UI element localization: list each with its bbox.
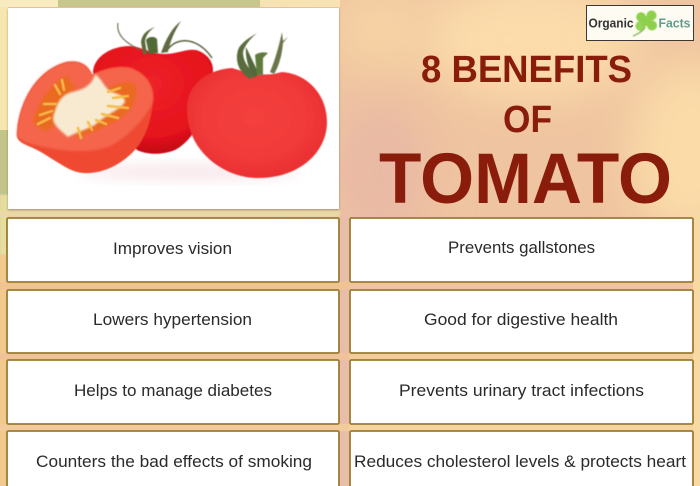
benefit: lowers hypertension bbox=[7, 290, 339, 353]
back tomato bbox=[93, 21, 213, 154]
benefit: cholesterol and heart: Reduces cholesterol levels & protects heart bbox=[354, 452, 686, 471]
benefit: urinary tract infections bbox=[350, 360, 693, 424]
cut face bbox=[17, 62, 153, 151]
benefit: prevents gallstones: Prevents gallstones bbox=[448, 238, 595, 257]
benefit: manage diabetes: Helps to manage diabetes bbox=[74, 381, 272, 400]
benefit: digestive health: Good for digestive health bbox=[424, 310, 618, 329]
logo word: Organic: Organic bbox=[588, 16, 634, 30]
cavities bbox=[33, 75, 75, 132]
back tomato stem bbox=[118, 21, 212, 58]
benefit: improves vision: Improves vision bbox=[113, 239, 232, 258]
icon: clover bbox=[633, 10, 657, 36]
core bbox=[53, 74, 125, 137]
benefit: digestive health bbox=[350, 290, 693, 353]
seeds bbox=[38, 80, 128, 138]
benefit: prevents gallstones bbox=[350, 218, 693, 282]
benefit: cholesterol and heart bbox=[350, 431, 693, 486]
title line: 8 benefits: 8 BENEFITS bbox=[421, 49, 632, 91]
title bbox=[379, 49, 672, 219]
right tomato stem bbox=[237, 32, 288, 79]
soft shadow under tomatoes bbox=[80, 165, 300, 179]
photo frame bbox=[8, 8, 339, 209]
title line: tomato: TOMATO bbox=[379, 140, 672, 219]
benefit: lowers hypertension: Lowers hypertension bbox=[93, 310, 252, 329]
logo word: Facts: Facts bbox=[658, 16, 690, 30]
benefit: effects of smoking: Counters the bad effects of smoking bbox=[36, 452, 312, 471]
logo box bbox=[586, 6, 694, 40]
benefit: improves vision bbox=[7, 218, 339, 282]
cut tomato bbox=[17, 62, 153, 173]
benefit: urinary tract infections: Prevents urinary tract infections bbox=[399, 381, 644, 400]
benefit: effects of smoking bbox=[7, 431, 339, 486]
logo bbox=[586, 6, 694, 40]
title line: of: OF bbox=[503, 99, 552, 141]
tomato photo bbox=[8, 8, 339, 209]
benefit: manage diabetes bbox=[7, 360, 339, 424]
right tomato bbox=[187, 32, 327, 178]
